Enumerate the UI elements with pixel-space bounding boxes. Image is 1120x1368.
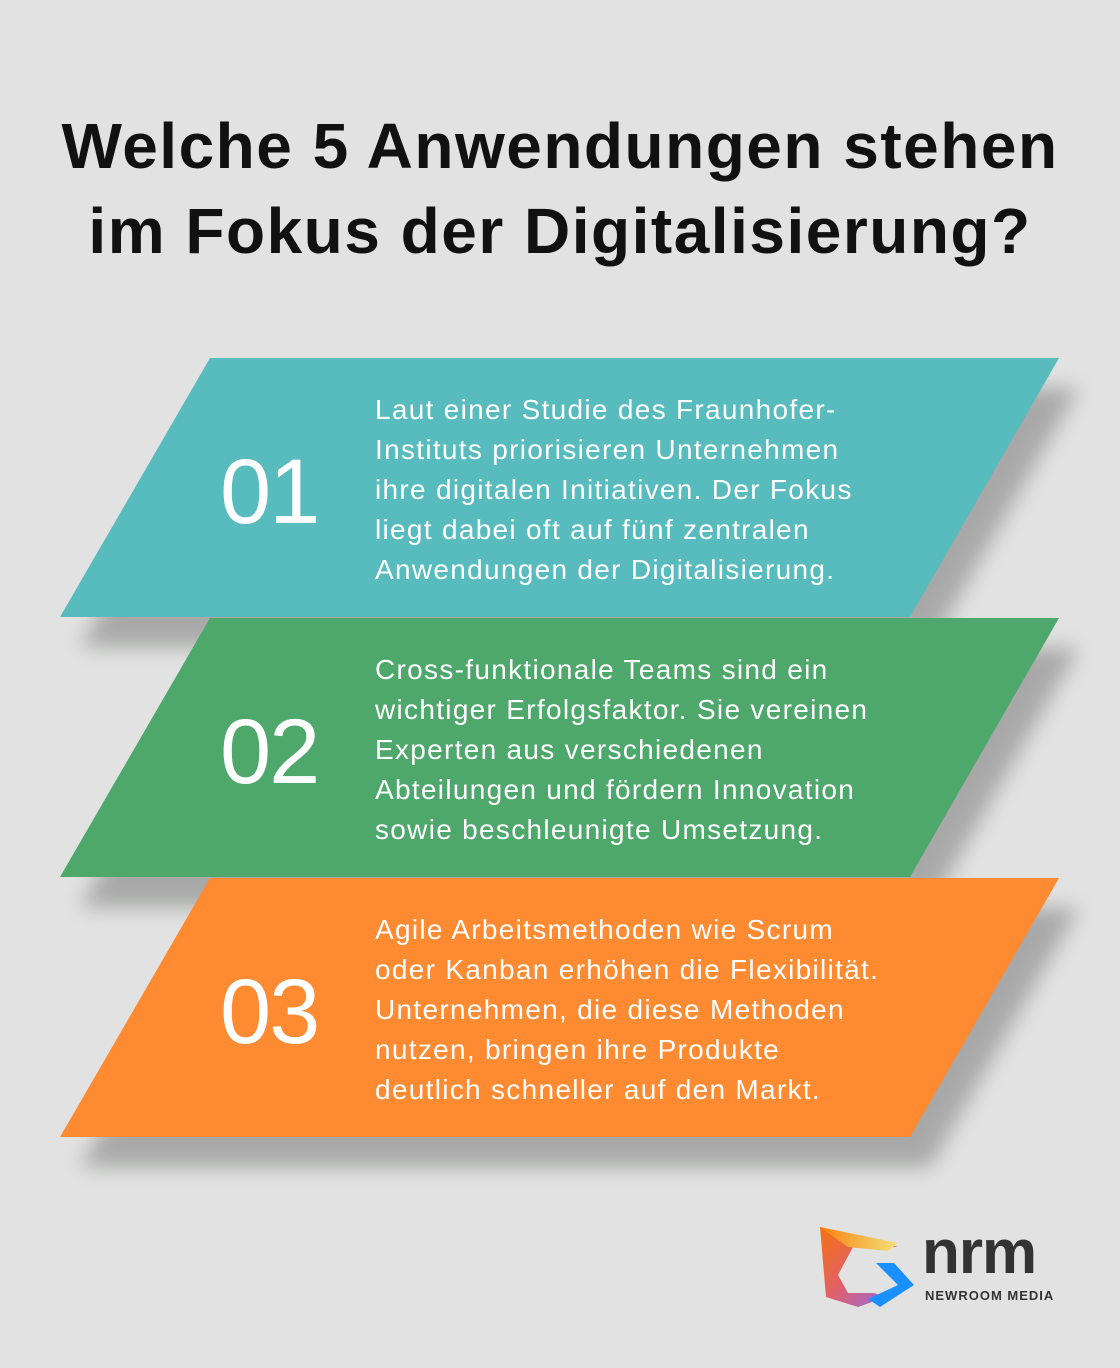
number 03: 03 (220, 961, 318, 1063)
title: Welche 5 Anwendungen stehen (61, 110, 1059, 182)
text 01: ihre digitalen Initiativen. Der Fokus (375, 474, 853, 505)
text 03: nutzen, bringen ihre Produkte (375, 1034, 780, 1065)
text 02: wichtiger Erfolgsfaktor. Sie vereinen (375, 694, 868, 725)
panel: 01 (220, 394, 853, 585)
tagline: NEWROOM MEDIA (925, 1288, 1054, 1303)
text 02: Experten aus verschiedenen (375, 734, 764, 765)
number 01: 01 (220, 441, 318, 543)
text 01: Laut einer Studie des Fraunhofer- (375, 394, 837, 425)
number 02: 02 (220, 701, 318, 803)
wordmark: nrm (922, 1218, 1036, 1287)
logo (820, 1218, 1054, 1307)
text 03: deutlich schneller auf den Markt. (375, 1074, 821, 1105)
text 02: Cross-funktionale Teams sind ein (375, 654, 829, 685)
panel: 02 (220, 654, 868, 845)
text 02: sowie beschleunigte Umsetzung. (375, 814, 823, 845)
text 01: Anwendungen der Digitalisierung. (375, 554, 835, 585)
title: im Fokus der Digitalisierung? (88, 195, 1032, 267)
text 01 (375, 394, 853, 585)
title (61, 110, 1059, 267)
text 03: Unternehmen, die diese Methoden (375, 994, 845, 1025)
text 01: Instituts priorisieren Unternehmen (375, 434, 839, 465)
text 02: Abteilungen und fördern Innovation (375, 774, 855, 805)
icon: logo mark (820, 1227, 914, 1307)
text 01: liegt dabei oft auf fünf zentralen (375, 514, 810, 545)
text 03 (375, 914, 879, 1105)
text 03: oder Kanban erhöhen die Flexibilität. (375, 954, 879, 985)
text 02 (375, 654, 868, 845)
text 03: Agile Arbeitsmethoden wie Scrum (375, 914, 834, 945)
panel: 03 (220, 914, 879, 1105)
